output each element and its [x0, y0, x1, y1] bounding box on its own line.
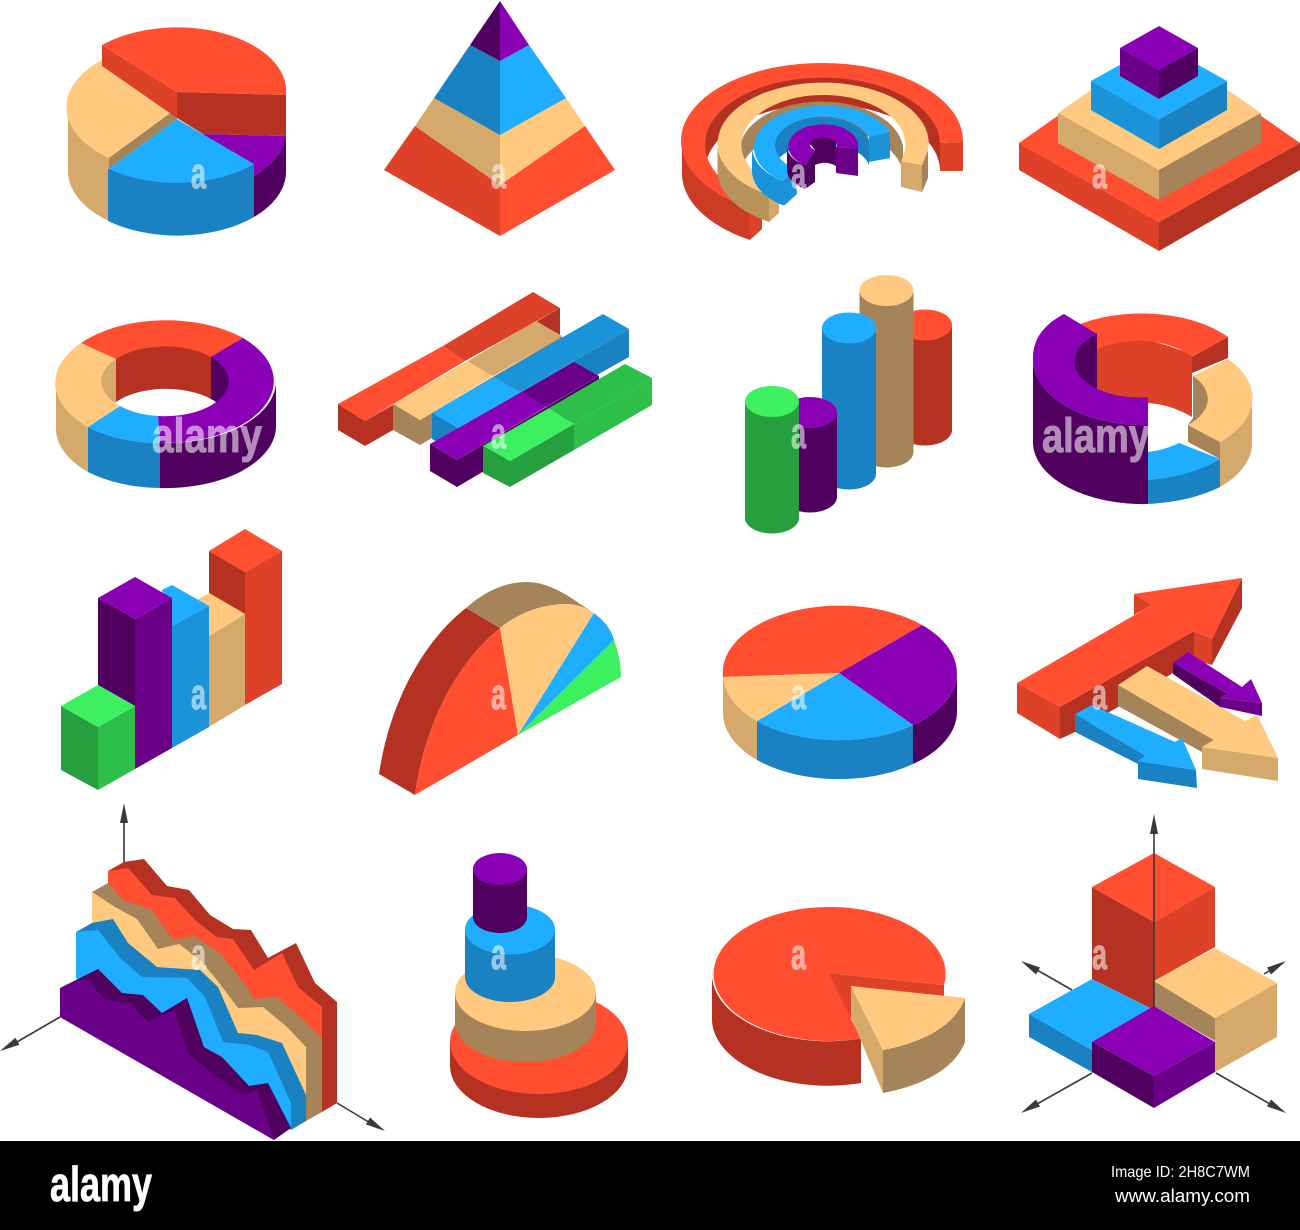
- pie body: [712, 907, 946, 1086]
- slice: red: [102, 27, 286, 136]
- column: purple: [783, 397, 837, 512]
- arrow: tan: [1118, 666, 1278, 781]
- chart: exploded pie cylinder: [66, 27, 286, 236]
- ring: tan: [718, 83, 929, 222]
- chart: half pie upright: [379, 582, 621, 795]
- wedge: green: [518, 640, 621, 735]
- diagonal axes: [1021, 961, 1286, 1113]
- column: tan: [860, 275, 914, 467]
- vertical axis: [1150, 814, 1158, 1008]
- donut hole walls: [96, 340, 236, 424]
- chart: cylinder columns: [745, 275, 952, 534]
- watermarks: a: [1092, 670, 1107, 719]
- area: purple: [60, 969, 291, 1140]
- watermarks: alamy: [1042, 410, 1150, 463]
- chart: donut left: [55, 320, 276, 488]
- column: red: [209, 529, 282, 705]
- ring: blue: [752, 105, 890, 205]
- watermarks: [152, 149, 1150, 979]
- pulled wedge: [851, 986, 965, 1093]
- footer bar: [0, 1141, 1300, 1230]
- area: blue: [76, 919, 306, 1130]
- cube: tan: [1154, 948, 1277, 1072]
- wedge: red: [379, 608, 518, 795]
- disc: tan: [455, 954, 596, 1062]
- slice: blue: [108, 119, 254, 236]
- watermarks: a: [791, 149, 806, 198]
- chart: 3D bar columns: [61, 529, 282, 790]
- ring: red: [681, 63, 963, 240]
- donut outer sides: [56, 381, 276, 488]
- cube: purple: [1092, 1006, 1215, 1108]
- chart: concentric half rings: [681, 63, 963, 240]
- watermarks: a: [791, 409, 806, 458]
- watermarks: a: [191, 930, 206, 979]
- slice: tan: [66, 60, 177, 221]
- cube: red: [1092, 853, 1215, 1010]
- watermarks: a: [491, 149, 506, 198]
- donut top segments: [55, 320, 274, 443]
- column: blue: [162, 585, 209, 748]
- bar: tan: [393, 321, 562, 445]
- watermarks: a: [191, 149, 206, 198]
- slice: purple: [203, 134, 286, 217]
- chart: layered area with axes: [0, 803, 385, 1140]
- column: tan: [172, 593, 245, 727]
- disc: blue: [465, 904, 555, 1002]
- chart: arrows: [1017, 578, 1278, 788]
- disc: purple: [473, 853, 527, 933]
- column: green: [61, 685, 135, 790]
- bar: blue: [432, 314, 629, 453]
- layer: tan: [415, 98, 585, 185]
- step: tan: [1058, 43, 1261, 200]
- bar: green: [483, 364, 652, 487]
- pie sides: [723, 673, 957, 779]
- wedge: blue: [518, 613, 614, 735]
- chart: stepped square pyramid: [1019, 26, 1300, 251]
- website: www.alamy.com: [1114, 1186, 1250, 1206]
- arrow: red: [1017, 578, 1242, 739]
- layer: blue: [434, 45, 566, 135]
- step: purple cube: [1120, 26, 1198, 99]
- arrow: blue: [1075, 705, 1197, 788]
- watermarks: a: [791, 930, 806, 979]
- watermarks: a: [491, 409, 506, 458]
- segment: purple: [1033, 314, 1148, 504]
- step: red: [1019, 45, 1300, 251]
- footer logo: alamy: [50, 1158, 152, 1212]
- chart: stacked cylinders: [450, 853, 628, 1118]
- chart: flat pie: [723, 606, 957, 779]
- wedge: tan: [466, 582, 594, 735]
- arrow: purple: [1173, 652, 1262, 716]
- disc: red: [450, 990, 628, 1118]
- step: blue: [1091, 43, 1227, 149]
- column: green: [745, 386, 799, 534]
- watermarks: a: [491, 930, 506, 979]
- pie slices: [723, 606, 957, 740]
- chart: donut right with raised segment: [1033, 313, 1252, 504]
- watermarks: a: [1092, 149, 1107, 198]
- column: purple: [98, 577, 172, 769]
- area: tan: [92, 883, 322, 1121]
- bar: red: [338, 292, 560, 446]
- watermarks: a: [791, 670, 806, 719]
- watermarks: a: [191, 670, 206, 719]
- layer: purple: [470, 1, 529, 61]
- column: red: [898, 310, 952, 445]
- layer: red: [384, 126, 615, 236]
- column: blue: [822, 312, 876, 490]
- chart: horizontal isometric bars: [338, 292, 652, 487]
- ring: purple: [787, 124, 858, 189]
- image id: Image ID: 2H8C7WM: [1111, 1164, 1250, 1181]
- chart: layered pyramid: [384, 1, 615, 236]
- segment: blue: [1147, 443, 1220, 504]
- cube: blue: [1029, 979, 1154, 1072]
- axes: [0, 803, 385, 1131]
- chart: pie with pulled wedge: [712, 907, 965, 1093]
- bar: purple: [430, 362, 599, 487]
- area: red: [108, 859, 337, 1112]
- chart: cubes on axes: [1021, 814, 1286, 1113]
- segment: red: [1065, 313, 1228, 417]
- watermarks: alamy: [152, 410, 262, 463]
- segment: tan: [1188, 359, 1252, 487]
- watermarks: a: [491, 670, 506, 719]
- watermarks: a: [1092, 930, 1107, 979]
